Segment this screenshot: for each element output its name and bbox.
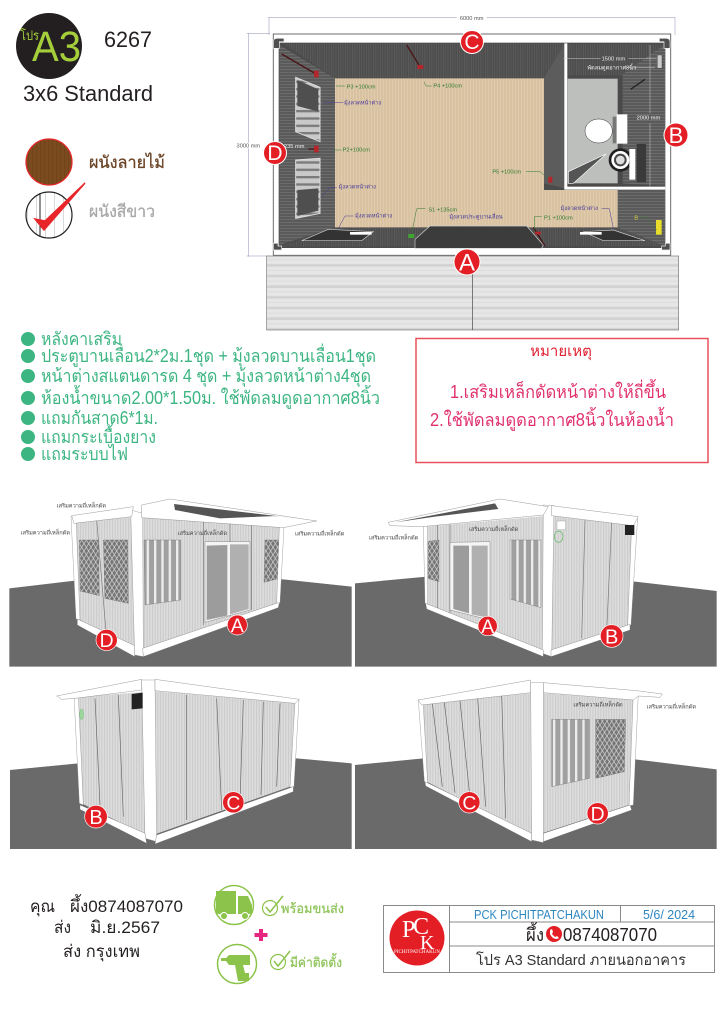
date: 5/6/ 2024 (643, 907, 695, 922)
screen labels: กันสาด (285, 315, 303, 322)
scene: rear-left view: C (226, 793, 240, 814)
notes panel (416, 338, 708, 462)
delivery ready label (262, 896, 344, 916)
screen labels: มุ้งลวดหน้าต่าง (355, 212, 392, 219)
company logo: P (402, 917, 415, 943)
scene: front-left view: เสริมความถี่เหล็กดัด (295, 528, 345, 537)
plan labels: P2+100cm (343, 148, 370, 154)
scene: rear-right view (355, 680, 717, 849)
bottom wall windows (302, 229, 645, 241)
plan labels: P4 +100cm (433, 84, 462, 90)
feature 6: แถมกระเบื้องยาง (41, 424, 156, 447)
marker C (460, 30, 484, 54)
icon: delivery truck (214, 886, 254, 924)
scene: front-left view: เสริมความถี่เหล็กดัด (21, 527, 70, 536)
wood floor (335, 78, 618, 227)
screen labels: มุ้งลวดหน้าต่าง (344, 100, 381, 107)
marker D (264, 142, 286, 165)
feature 7: แถมระบบไฟ (41, 443, 128, 464)
screen labels (272, 100, 613, 323)
company logo (390, 910, 444, 966)
badge: promo A3: A3 (32, 23, 81, 71)
legend: wood wall (26, 139, 165, 185)
scene: front-right view: เสริมความถี่เหล็กดัด (369, 532, 419, 541)
scene: front-right view: B (605, 626, 618, 648)
exhaust fan (657, 55, 662, 68)
plus sign (254, 929, 268, 941)
floor plan (237, 16, 679, 330)
model name: 3x6 Standard (23, 81, 153, 106)
marker C: C (464, 31, 480, 54)
sliding door (415, 226, 543, 248)
customer details: ผึ้ง0874087070 (70, 894, 183, 916)
marker B (664, 123, 688, 148)
scene: rear-left view: B (89, 807, 103, 829)
scene: front-left view: D (100, 631, 114, 652)
white plan labels (284, 45, 661, 187)
badge: promo A3 (16, 13, 82, 79)
feature 1: หลังคาเสริม (41, 329, 122, 349)
notes panel: 2.ใช้พัดลมดูดอากาศ8นิ้วในห้องน้ำ (430, 407, 674, 431)
scene: rear-left view (10, 679, 352, 849)
scene: rear-right view: เสริมความถี่เหล็กดัด (573, 700, 623, 709)
feature 4: ห้องน้ำขนาด2.00*1.50ม. ใช้พัดลมดูดอากาศ8นิ้ว (41, 385, 380, 409)
notes panel: หมายเหตุ (530, 343, 592, 361)
bathroom door (568, 154, 606, 183)
wash basin (609, 144, 646, 182)
customer details: มิ.ย.2567 (90, 918, 160, 937)
power conduits (282, 45, 662, 246)
contact (526, 922, 657, 945)
legend: white wall selected: ผนังสีขาว (89, 202, 155, 221)
feature 2: ประตูบานเลื่อน2*2ม.1ชุด + มุ้งลวดบานเลื่อน1ชุด (41, 343, 376, 367)
customer details: คุณ (30, 897, 55, 917)
legend: white wall selected (26, 183, 155, 238)
legend: wood wall: ผนังลายไม้ (89, 152, 165, 172)
marker A: A (459, 250, 475, 276)
bathroom floor (568, 75, 623, 184)
screen labels: มุ้งลวดหน้าต่าง (561, 205, 598, 212)
badge: promo A3: โปร (20, 28, 39, 43)
scene: front-left view: A (231, 616, 244, 637)
feature list (21, 329, 380, 464)
company logo: C (413, 914, 429, 940)
company logo: K (420, 932, 435, 954)
plan labels: B (634, 215, 638, 221)
toilet (585, 114, 627, 144)
scene: rear-right view: เสริมความถี่เหล็กดัด (647, 701, 696, 710)
plan labels: P3 +100cm (347, 84, 376, 90)
model number: 6267 (104, 27, 152, 52)
installation cost label (270, 951, 342, 970)
corner posts (273, 38, 670, 250)
customer details: ส่ง (54, 918, 71, 937)
partition walls (564, 43, 665, 190)
customer details: ส่ง กรุงเทพ (63, 942, 140, 962)
room shell (279, 43, 665, 248)
white plan labels: พัดลมดูดอากาศ8นิ้ว (587, 63, 636, 71)
scene: rear-right view: C (462, 793, 476, 814)
left wall windows (296, 77, 320, 218)
customer details (30, 894, 183, 962)
project title: โปร A3 Standard ภายนอกอาคาร (476, 951, 686, 969)
feature 6 (21, 424, 156, 447)
plan labels: S1 +135cm (428, 208, 457, 214)
feature 5: แถมกันสาด6*1ม. (41, 408, 158, 428)
scene: front-right view: เสริมความถี่เหล็กดัด (469, 524, 519, 533)
plan labels: P5 +100cm (492, 169, 521, 175)
company logo: PICHITPATCHAKUN (394, 950, 440, 955)
container frame (273, 34, 671, 255)
scene: rear-right view: D (591, 804, 605, 825)
scene: front-right view: A (481, 617, 494, 638)
feature 3: หน้าต่างสแตนดารด 4 ชุด + มุ้งลวดหน้าต่าง4ชุด (41, 366, 371, 387)
delivery ready label: พร้อมขนส่ง (281, 901, 344, 916)
marker B: B (669, 123, 683, 148)
height dimension label: 3000 mm (237, 143, 260, 149)
installation cost label: มีค่าติดตั้ง (290, 953, 342, 970)
scene: front-left view: เสริมความถี่เหล็กดัด (57, 501, 106, 510)
icon: power drill (218, 944, 256, 984)
towel rail (631, 79, 645, 89)
screen labels: มุ้งลวดหน้าต่าง (339, 184, 376, 191)
marker A (454, 249, 480, 276)
plan labels: P1 +100cm (544, 215, 573, 221)
white plan labels: 235 mm (284, 144, 305, 150)
company name: PCK PICHITPATCHAKUN (474, 907, 604, 922)
screen labels: มุ้งลวดประตูบานเลื่อน (449, 213, 503, 221)
awning (267, 256, 679, 330)
white plan labels: 1500 mm (602, 56, 626, 62)
width dimension label: 6000 mm (460, 16, 484, 22)
white plan labels: 2000 mm (637, 115, 661, 121)
dimension lines (247, 17, 675, 257)
notes panel: 1.เสริมเหล็กดัดหน้าต่างให้ถี่ขึ้น (450, 379, 666, 402)
contact: 0874087070 (563, 925, 657, 945)
title block (384, 906, 714, 972)
scene: front-left view: เสริมความถี่เหล็กดัด (178, 528, 227, 537)
contact: ผึ้ง (526, 922, 544, 945)
plan labels (333, 82, 657, 233)
scene: front-left view (9, 499, 352, 667)
scene: front-right view (355, 499, 717, 667)
marker D: D (267, 142, 283, 165)
